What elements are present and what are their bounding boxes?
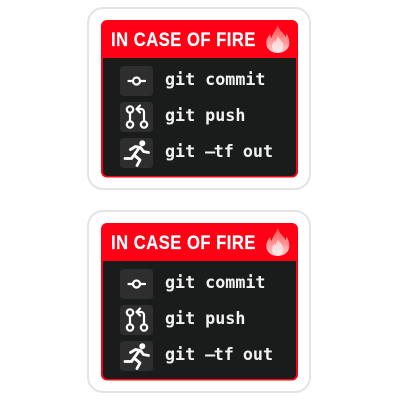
row: git push xyxy=(120,305,245,335)
icon: running person xyxy=(120,138,153,168)
sticker: top xyxy=(88,8,310,189)
command text: git push xyxy=(165,105,245,125)
icon: pull request xyxy=(120,305,153,335)
command text: git –tf out xyxy=(165,141,273,161)
sticker backing xyxy=(88,211,310,392)
card xyxy=(101,223,298,380)
sticker backing xyxy=(88,8,310,189)
icon: flame xyxy=(266,228,289,256)
command text: git commit xyxy=(165,69,265,89)
row: git -tf out xyxy=(120,138,273,168)
row: git -tf out xyxy=(120,341,273,371)
row: git commit xyxy=(120,269,265,299)
sticker: bottom xyxy=(88,211,310,392)
dark body panel xyxy=(103,58,296,176)
command text: git –tf out xyxy=(165,344,273,364)
command text: git push xyxy=(165,308,245,328)
icon: running person xyxy=(120,341,153,371)
card xyxy=(101,20,298,178)
title: IN CASE OF FIRE xyxy=(111,232,256,254)
row: git push xyxy=(120,102,245,132)
icon: pull request xyxy=(120,102,153,132)
icon: flame xyxy=(266,25,289,53)
icon: commit xyxy=(120,269,153,299)
icon: commit xyxy=(120,66,153,96)
dark body panel xyxy=(103,261,296,379)
row: git commit xyxy=(120,66,265,96)
title: IN CASE OF FIRE xyxy=(111,29,256,51)
command text: git commit xyxy=(165,272,265,292)
